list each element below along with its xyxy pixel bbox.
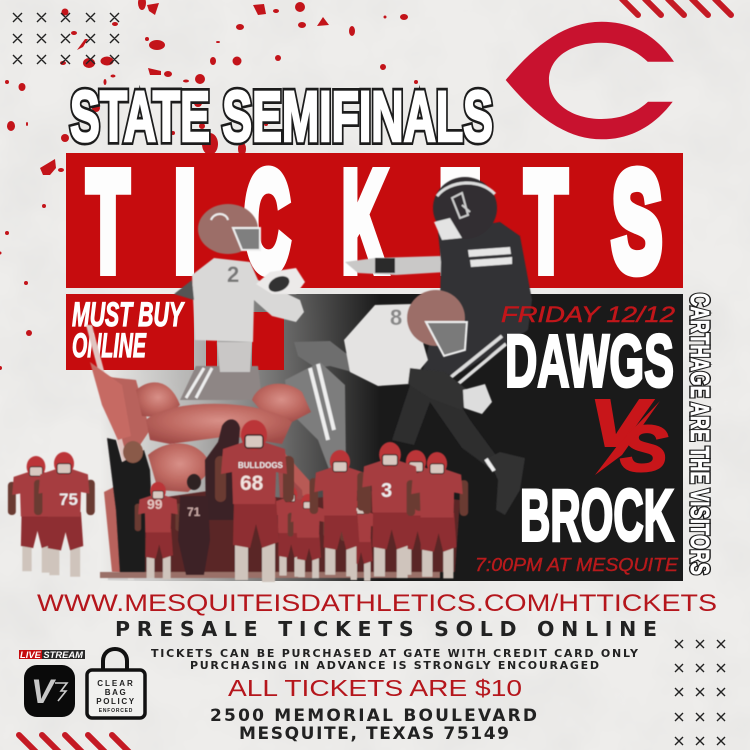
- players behind: [135, 450, 447, 581]
- player 99: 99: [147, 496, 163, 512]
- player: number 2: [174, 204, 305, 400]
- panel: must buy online: MUST BUY: [72, 296, 185, 334]
- side note: visitors: CARTHAGE ARE THE VISITORS: [685, 293, 715, 575]
- player 75: 75: [59, 490, 78, 509]
- side note: visitors: CARTHAGE ARE THE VISITORS: [685, 293, 715, 575]
- game time and place: 7:00PM AT MESQUITE: [475, 555, 679, 575]
- player 68: 68: [240, 472, 264, 495]
- ticket url: WWW.MESQUITEISDATHLETICS.COM/HTTICKETS: [37, 590, 717, 617]
- flag and coach: [86, 325, 152, 580]
- heading: tickets: E: [439, 142, 481, 300]
- panel: red tickets band: [66, 153, 683, 288]
- live stream tag: LIVE STREAM: [20, 650, 84, 660]
- player 71 in dark jersey: 71: [187, 505, 201, 519]
- red accent bars: [206, 294, 284, 370]
- player: number 8 tackling: [285, 290, 492, 472]
- heading: tickets: K: [342, 142, 386, 300]
- player far left: [8, 456, 65, 573]
- stadium address: MESQUITE, TEXAS 75149: [239, 724, 509, 744]
- heading: tickets: T: [525, 142, 567, 300]
- player right of 68: [310, 450, 371, 576]
- panel: dark matchup panel: [66, 294, 683, 581]
- cross pattern top left: [13, 13, 119, 64]
- player 71 in dark jersey: [178, 474, 210, 575]
- player: number 2: 2: [227, 262, 239, 287]
- panel: must buy online: [66, 294, 194, 370]
- icon: clear bag policy: CLEAR: [97, 679, 135, 688]
- player number 3: 3: [381, 480, 392, 502]
- player: dark jersey quarterback: [345, 177, 532, 515]
- date: FRIDAY 12/12: [501, 302, 675, 327]
- versus mark: V: [589, 386, 654, 461]
- heading: state semifinals: STATE SEMIFINALS: [70, 78, 493, 157]
- stadium address: [210, 706, 537, 744]
- ticket price: ALL TICKETS ARE $10: [228, 675, 522, 701]
- dark jersey player behind: [205, 419, 240, 520]
- heading: state semifinals: [70, 78, 493, 157]
- player 75: [34, 452, 95, 577]
- inflatable bulldog tunnel: [100, 376, 316, 574]
- heading: tickets: T: [87, 142, 129, 300]
- icon: clear bag policy: BAG: [105, 688, 127, 697]
- heading: tickets: I: [174, 142, 196, 300]
- icon: clear bag policy: ENFORCED: [99, 708, 133, 714]
- icon: clear bag policy: POLICY: [96, 697, 136, 706]
- heading: tickets: [87, 142, 662, 300]
- versus mark: [589, 386, 668, 485]
- red stripes bottom left: [19, 735, 129, 750]
- icon: streaming app: [24, 665, 75, 717]
- heading: tickets: S: [612, 142, 662, 300]
- heading: tickets: C: [244, 142, 290, 300]
- icon: streaming app: V: [31, 673, 57, 711]
- versus mark: S: [620, 412, 668, 485]
- panel: must buy online: ONLINE: [72, 327, 147, 365]
- player 68: [215, 420, 294, 582]
- player number 3: [357, 442, 424, 578]
- red stripes top right: [622, 0, 731, 15]
- purchase note: [151, 647, 639, 672]
- player 68: BULLDOGS: [238, 461, 284, 470]
- presale heading: PRESALE TICKETS SOLD ONLINE: [115, 617, 657, 641]
- icon: clear bag policy: [87, 649, 145, 718]
- player far right: [407, 452, 468, 578]
- football team running out: [8, 419, 468, 582]
- red paint splatter: [0, 0, 418, 370]
- purchase note: TICKETS CAN BE PURCHASED AT GATE WITH CREDIT CARD ONLY: [151, 647, 639, 660]
- heading: state semifinals: STATE SEMIFINALS: [70, 78, 493, 157]
- Carthage C logo: [506, 22, 674, 139]
- purchase note: PURCHASING IN ADVANCE IS STRONGLY ENCOURAGED: [190, 659, 599, 672]
- player: number 8 tackling: 8: [390, 305, 402, 330]
- stadium address: 2500 MEMORIAL BOULEVARD: [210, 706, 537, 726]
- cross pattern bottom right: [675, 640, 725, 745]
